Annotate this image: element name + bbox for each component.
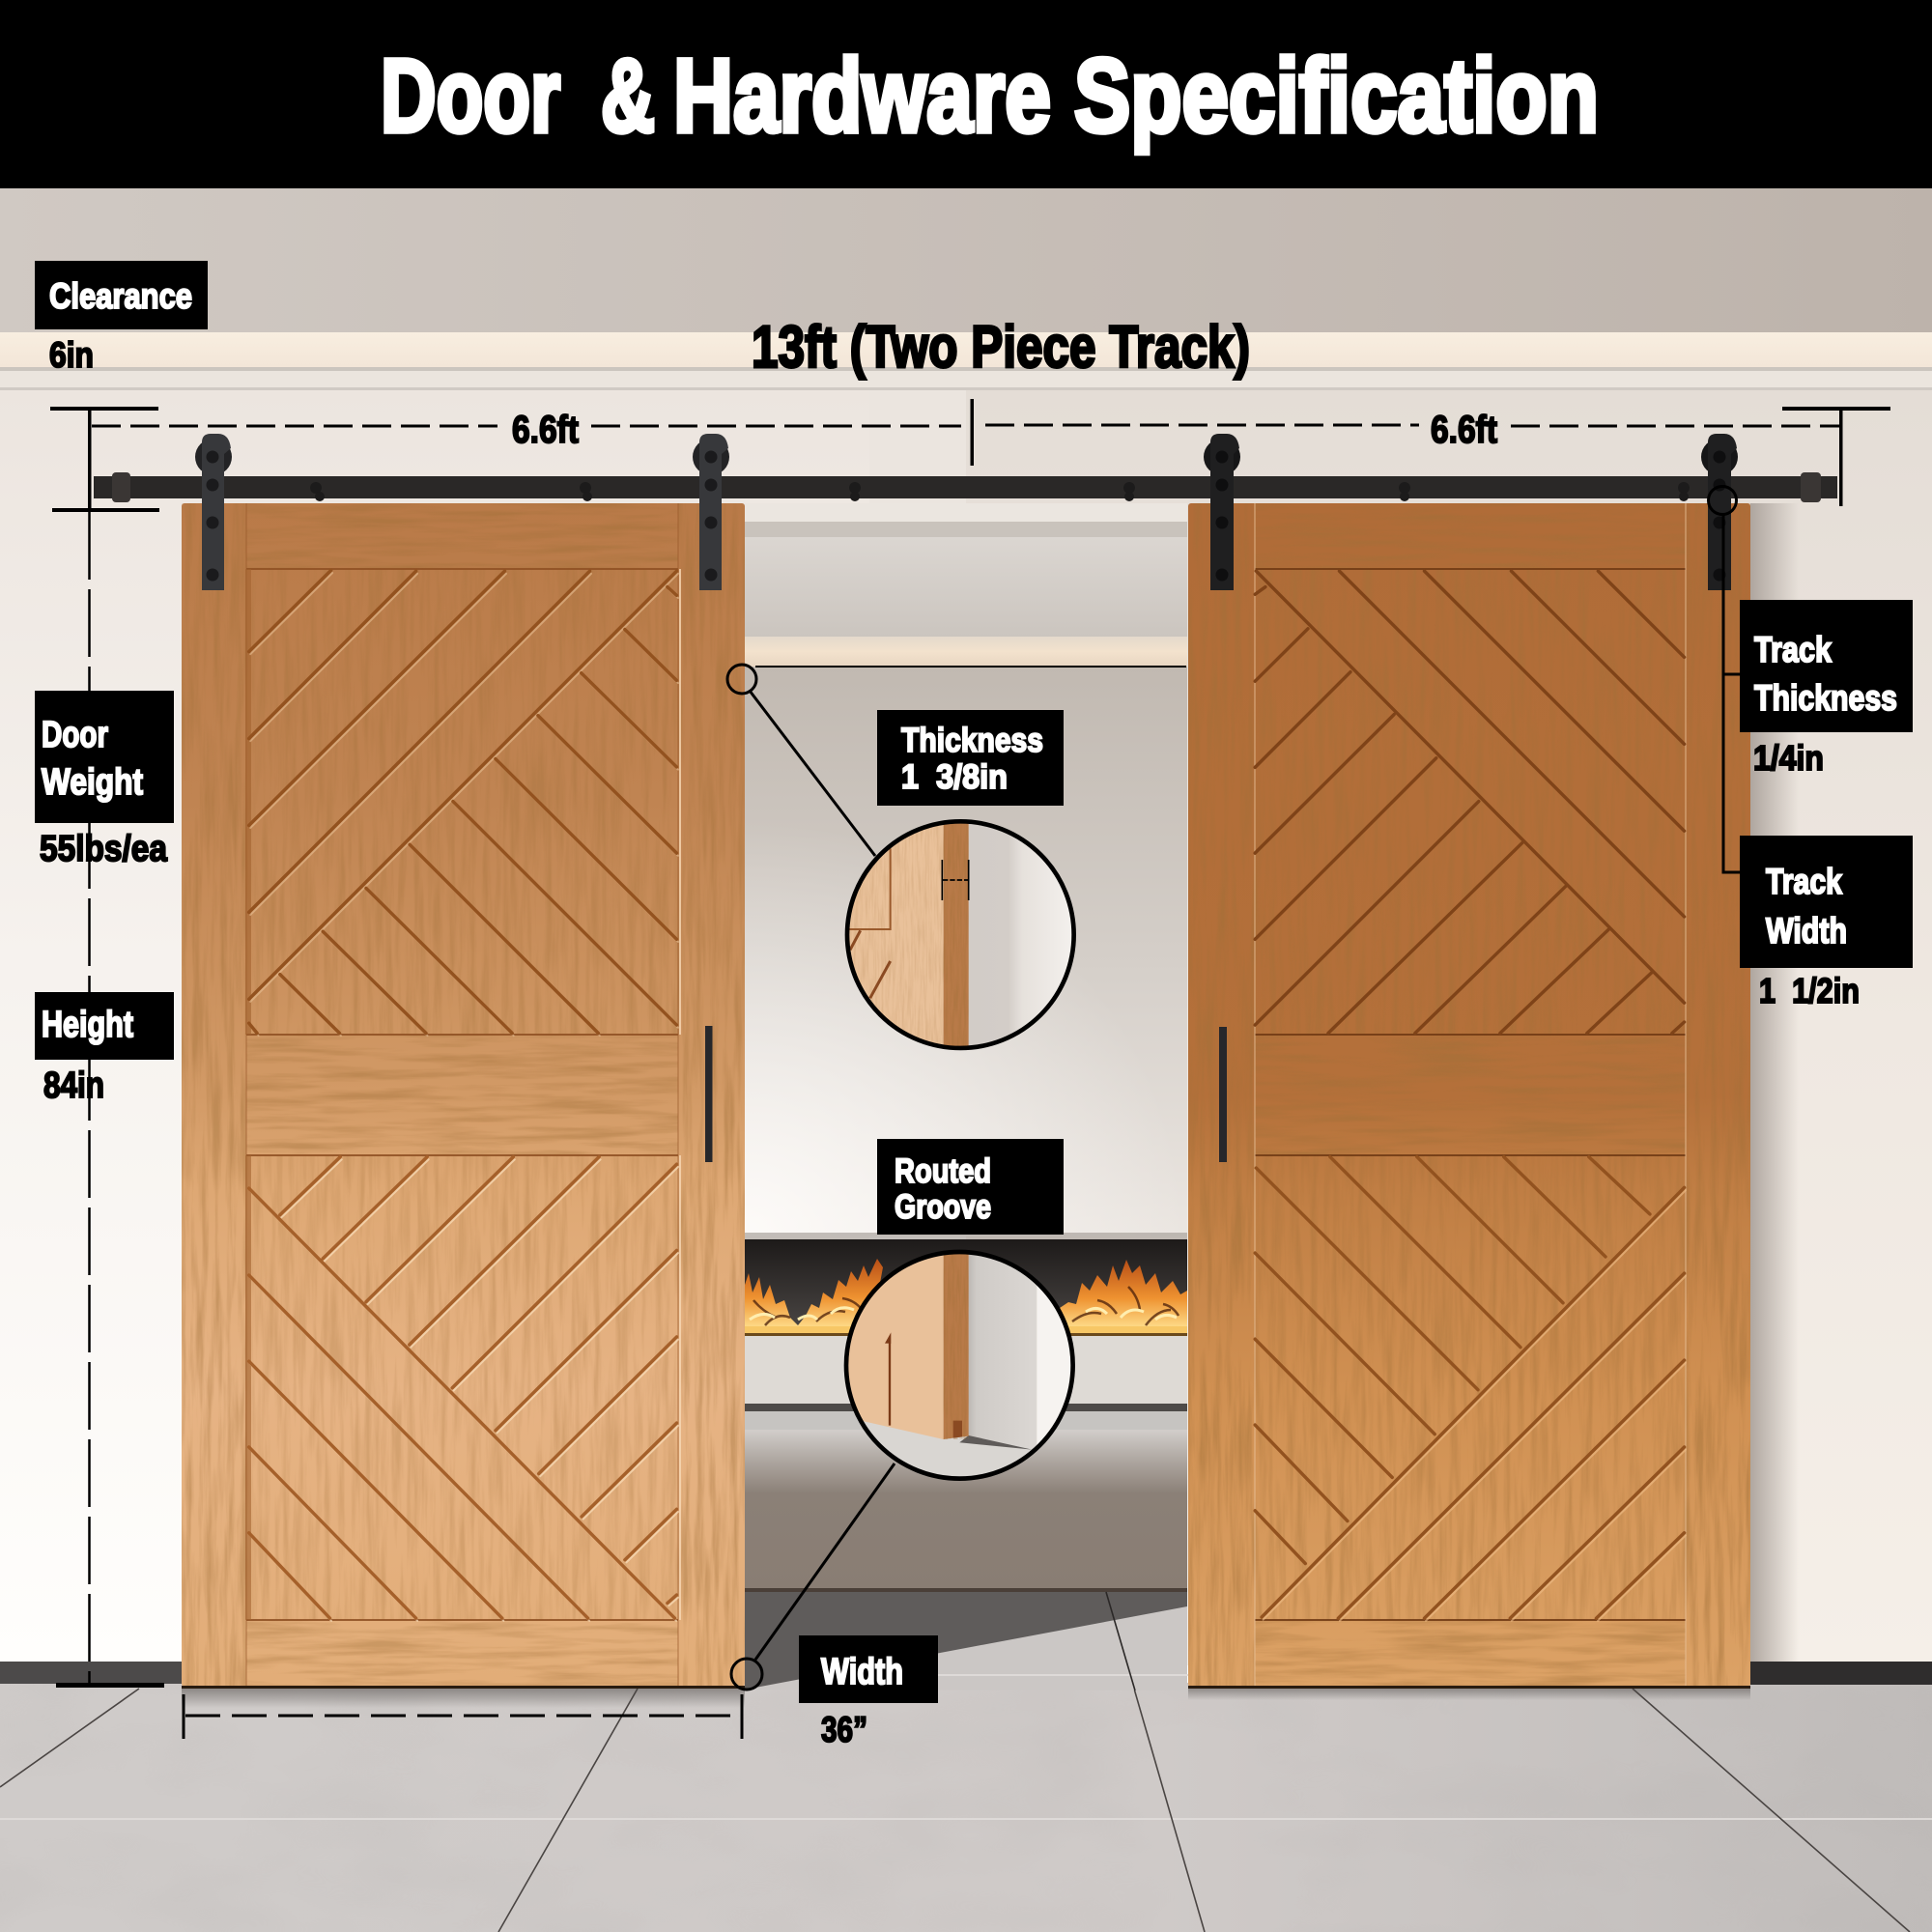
upper panel grooves [249,570,678,1036]
lower panel grooves [249,1157,678,1621]
hanger strap 3 [1204,434,1240,590]
right barn door [1188,503,1750,1689]
label: thickness: Thickness [901,722,1043,759]
fireplace with flames [745,1239,1187,1336]
label: width [799,1635,938,1749]
track end stops [112,472,1821,502]
track mounting bolts [310,482,1690,501]
dimension: 6.6ft left and right over track: 6.6ft [1431,409,1497,451]
height dimension line [56,512,164,1688]
label: door weight: 55lbs/ea [40,829,168,869]
hanger strap 4 [1701,434,1738,590]
zoom lens: door thickness detail [843,818,1079,1053]
dimension: 6.6ft left and right over track [92,399,1840,466]
title bar [0,0,1932,188]
label: width: 36” [821,1710,867,1749]
label: track width: Width [1766,911,1847,951]
track callout leader lines [1708,487,1741,872]
thickness callout leader lines [727,665,1186,856]
label: track width: 1 1/2in [1759,971,1860,1010]
label: track width [1740,836,1913,1010]
label: track thickness: 1/4in [1753,738,1824,778]
hanger strap 1 [195,434,232,590]
label: height [35,992,174,1106]
title text: Door [381,37,560,154]
label: thickness [877,710,1064,806]
label: door weight: Door [42,715,108,755]
label: routed groove: Routed [895,1152,991,1190]
room background: wall and ceiling band [0,188,1932,1665]
label: thickness: 1 3/8in [901,758,1008,796]
sliding track rail [94,472,1837,502]
baseboard [0,1662,1932,1685]
label: clearance: Clearance [49,276,192,316]
label: routed groove [877,1139,1064,1235]
label: height: Height [42,1005,133,1045]
title text: Hardware [673,37,1051,154]
label: width: Width [821,1652,903,1692]
title text: & [601,37,655,154]
label: track width: Track [1766,862,1842,901]
label: height: 84in [43,1065,104,1106]
track length heading: 13ft (Two Piece Track) [752,314,1250,380]
label: door weight: Weight [42,762,143,803]
label: clearance: 6in [49,335,94,375]
label: track thickness [1740,600,1913,778]
dimension: 6.6ft left and right over track: 6.6ft [512,409,579,451]
lower panel grooves [1255,1157,1686,1621]
label: clearance [35,261,208,375]
room seen through the opening [745,503,1188,1690]
zoom lens: routed groove detail [843,1249,1079,1491]
label: door weight [35,691,174,869]
left barn door [182,503,745,1689]
groove leader line and width marker [731,1463,895,1690]
door handles [705,1026,1227,1162]
clearance dimension brackets [50,407,1890,512]
title text [381,37,1599,154]
floor with tile joints [0,1592,1932,1932]
upper panel grooves [1255,571,1685,1034]
label: track thickness: Track [1754,630,1832,669]
label: track thickness: Thickness [1754,678,1897,718]
title text: Specification [1074,37,1599,154]
width dimension line [182,1694,744,1739]
label: routed groove: Groove [895,1188,991,1226]
hanger strap 2 [693,434,729,590]
